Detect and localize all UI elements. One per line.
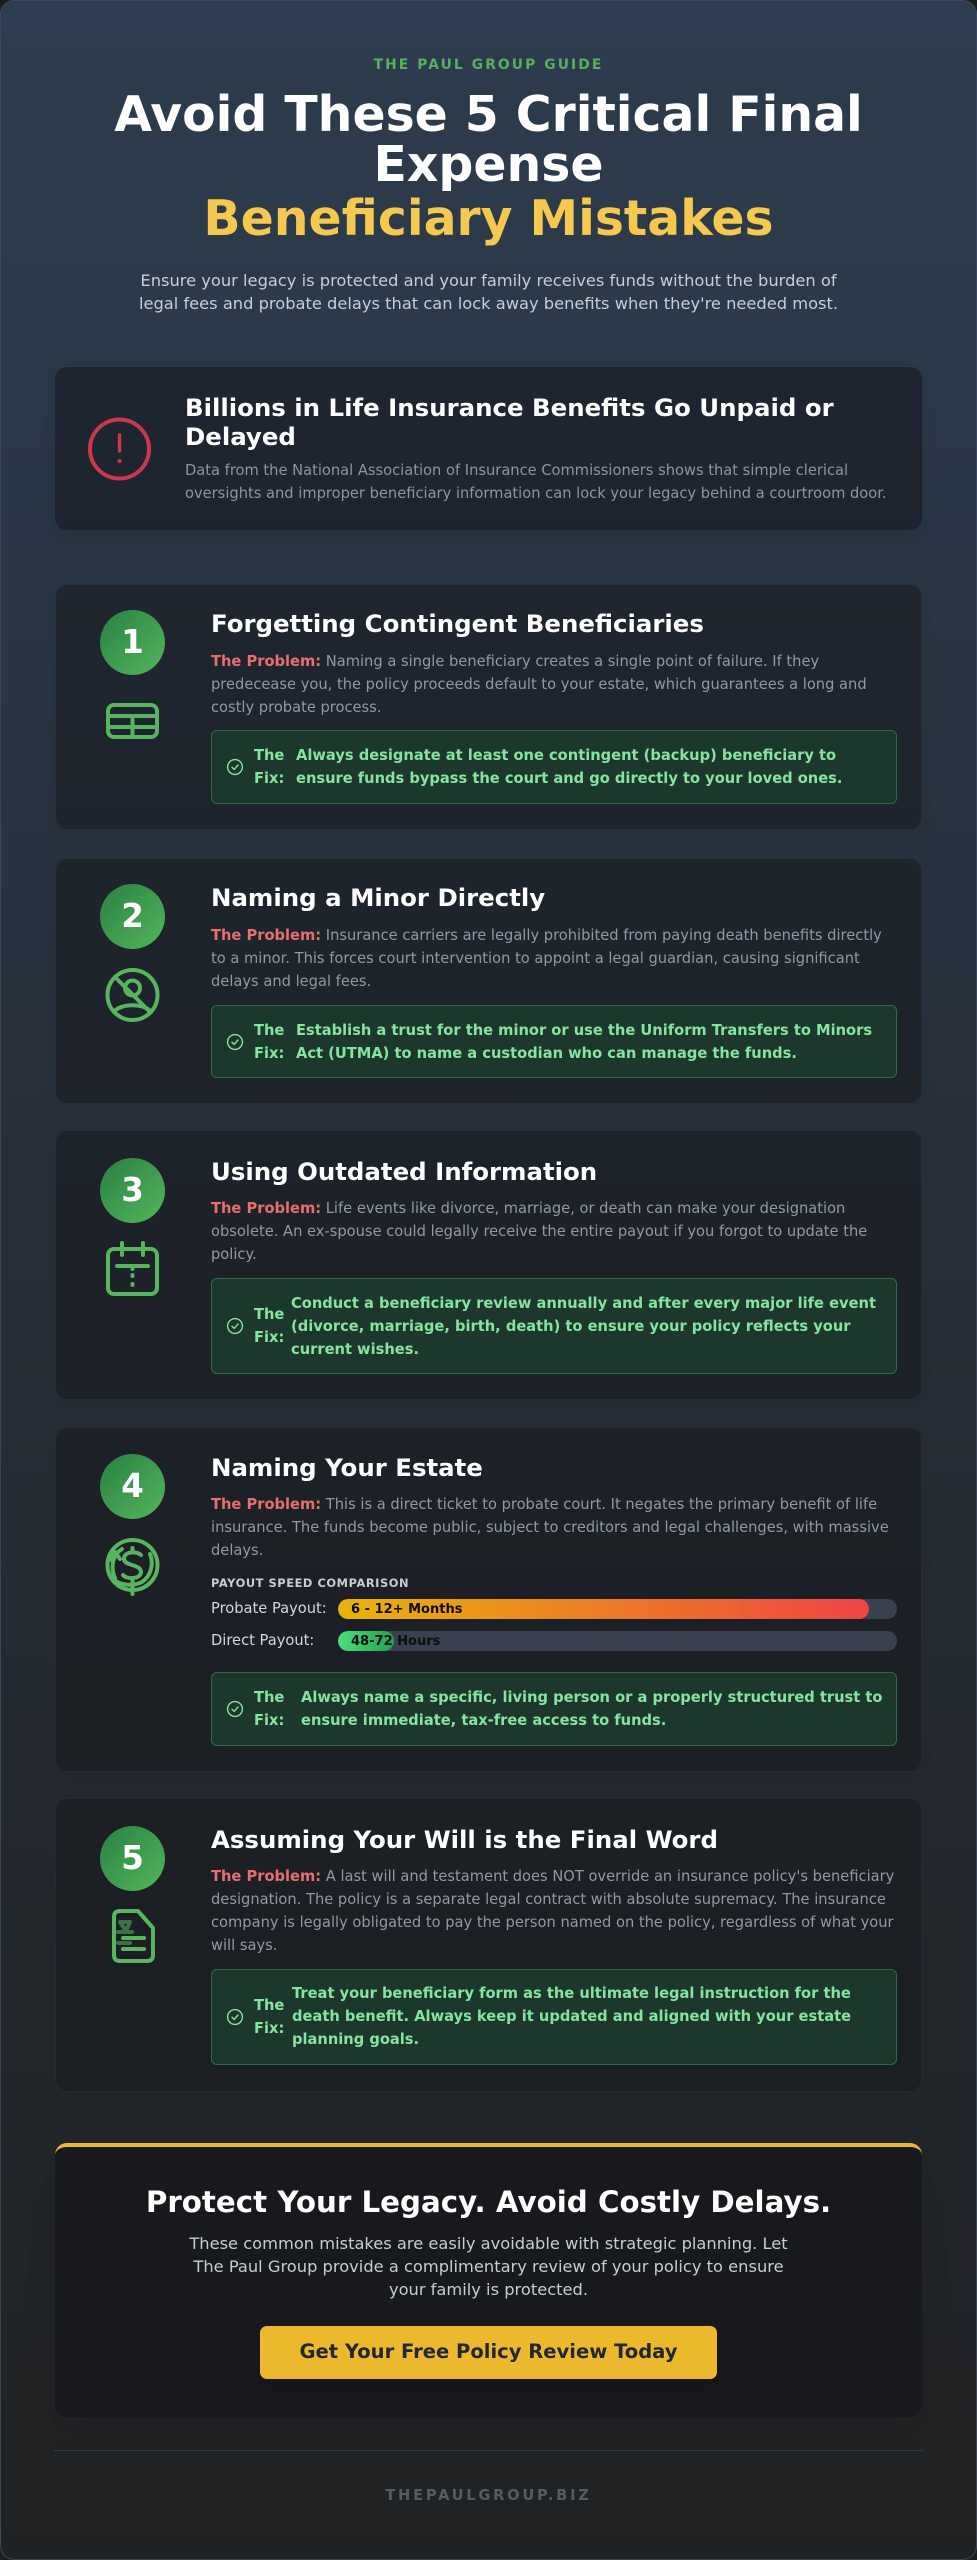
subtitle: Ensure your legacy is protected and your family receives funds without the burden of: [140, 271, 837, 290]
fix text: [292, 1985, 851, 2048]
fix text: Establish a trust for the minor or use the Uniform Transfers to Minors: [296, 1022, 872, 1039]
fix text: [296, 747, 842, 787]
icon: check: [226, 758, 244, 776]
mistake 1 problem: [211, 653, 867, 716]
panel: mistake 4: [55, 1427, 922, 1772]
alert heading: Delayed: [185, 422, 296, 451]
fix label: Fix:: [254, 1329, 284, 1346]
mistake 4 problem: insurance. The funds become public, subject to creditors and legal challenges, with massive: [211, 1519, 889, 1536]
fix text: Always name a specific, living person or a properly structured trust to: [301, 1689, 882, 1706]
mistake 4 problem: [211, 1496, 889, 1559]
fix label: The: [254, 747, 284, 764]
mistake 4 heading: Naming Your Estate: [211, 1453, 483, 1482]
bar: probate: 6 - 12+ Months: [351, 1602, 462, 1617]
icon: table: [106, 703, 159, 739]
number badge 1: 1: [121, 623, 144, 661]
mistake 5 problem: will says.: [211, 1937, 277, 1954]
mistake 1 heading: Forgetting Contingent Beneficiaries: [211, 609, 704, 638]
mistake 5 problem: The Problem: A last will and testament does NOT override an insurance policy's beneficiary: [211, 1868, 894, 1885]
alert description: [185, 462, 887, 502]
fix text: death benefit. Always keep it updated and aligned with your estate: [292, 2008, 851, 2025]
number badge 4: 4: [121, 1467, 144, 1505]
mistake 1 problem: The Problem: Naming a single beneficiary creates a single point of failure. If they: [211, 653, 819, 670]
mistake 3 problem: The Problem: Life events like divorce, marriage, or death can make your designation: [211, 1200, 845, 1217]
title: [114, 86, 863, 247]
fix text: Always designate at least one contingent (backup) beneficiary to: [296, 747, 836, 764]
fix text: (divorce, marriage, birth, death) to ensure your policy reflects your: [291, 1318, 851, 1335]
fix text: [296, 1022, 872, 1062]
number badge 5: 5: [121, 1839, 144, 1877]
fix callout 5: [211, 1969, 897, 2065]
title: Beneficiary Mistakes: [203, 190, 774, 247]
fix callout 4: [211, 1672, 897, 1746]
icon: no person: [106, 968, 160, 1022]
icon: check: [226, 1034, 244, 1050]
fix label: The: [254, 1689, 284, 1706]
CTA text: [189, 2234, 788, 2299]
panel: mistake 2: [55, 858, 922, 1104]
fix text: [301, 1689, 882, 1729]
bar: direct: [338, 1631, 897, 1651]
mistake 5 problem: company is legally obligated to pay the person named on the policy, regardless of what your: [211, 1914, 894, 1931]
icon: check: [226, 2008, 244, 2026]
icon: calendar: [106, 1241, 159, 1296]
icon: alert circle: [88, 418, 151, 480]
fix callout 1: [211, 730, 897, 804]
fix label: The: [254, 1022, 284, 1039]
icon: document: [112, 1909, 155, 1963]
fix label: [254, 1997, 284, 2037]
mistake 5 problem: [211, 1868, 894, 1954]
CTA text: your family is protected.: [389, 2280, 588, 2299]
fix text: [291, 1295, 876, 1358]
panel: call to action: [55, 2143, 922, 2417]
fix label: The: [254, 1306, 284, 1323]
panel: mistake 1: [55, 584, 922, 830]
panel: alert banner: [55, 367, 922, 530]
fix label: Fix:: [254, 770, 284, 787]
fix label: [254, 1306, 284, 1346]
mistake 5 problem: designation. The policy is a separate legal contract with absolute supremacy. The insurance: [211, 1891, 886, 1908]
mistake 2 heading: Naming a Minor Directly: [211, 883, 545, 912]
mistake 3 problem: [211, 1200, 867, 1263]
number badge 2: [100, 884, 165, 949]
CTA button: [260, 2326, 717, 2379]
alert heading: [185, 393, 834, 451]
icon: check: [226, 1318, 244, 1334]
fix label: Fix:: [254, 1712, 284, 1729]
mistake 4 problem: The Problem: This is a direct ticket to probate court. It negates the primary benefit of life: [211, 1496, 877, 1513]
title: Avoid These 5 Critical Final: [114, 86, 863, 143]
fix text: current wishes.: [291, 1341, 419, 1358]
chart: payout speed comparison: [211, 1576, 897, 1651]
number badge 1: [100, 610, 165, 675]
fix label: [254, 747, 284, 787]
number badge 4: [100, 1454, 165, 1519]
subtitle: [139, 271, 838, 313]
fix label: Fix:: [254, 2020, 284, 2037]
alert description: oversights and improper beneficiary information can lock your legacy behind a courtroom door.: [185, 485, 887, 502]
alert heading: Billions in Life Insurance Benefits Go Unpaid or: [185, 393, 834, 422]
subtitle: legal fees and probate delays that can lock away benefits when they're needed most.: [139, 294, 838, 313]
mistake 3 problem: obsolete. An ex-spouse could legally receive the entire payout if you forgot to update the: [211, 1223, 867, 1240]
mistake 2 problem: [211, 927, 882, 990]
mistake 1 problem: costly probate process.: [211, 699, 381, 716]
row label: probate: Probate Payout:: [211, 1600, 327, 1617]
CTA heading: Protect Your Legacy. Avoid Costly Delays.: [146, 2185, 831, 2219]
title: Expense: [374, 136, 603, 193]
panel: mistake 5: [55, 1798, 922, 2092]
bar: probate: [338, 1599, 897, 1619]
panel: mistake 3: [55, 1130, 922, 1400]
mistake 5 heading: Assuming Your Will is the Final Word: [211, 1825, 718, 1854]
row label: direct: Direct Payout:: [211, 1632, 314, 1649]
number badge 2: 2: [121, 897, 144, 935]
number badge 5: [100, 1826, 165, 1891]
fix text: ensure funds bypass the court and go directly to your loved ones.: [296, 770, 842, 787]
fix callout 3: [211, 1278, 897, 1374]
mistake 2 problem: to a minor. This forces court intervention to appoint a legal guardian, causing significant: [211, 950, 860, 967]
fix label: [254, 1022, 284, 1062]
fix text: ensure immediate, tax-free access to funds.: [301, 1712, 666, 1729]
fix callout 2: [211, 1005, 897, 1078]
number badge 3: 3: [121, 1171, 144, 1209]
fix text: Conduct a beneficiary review annually and after every major life event: [291, 1295, 876, 1312]
chart heading: PAYOUT SPEED COMPARISON: [211, 1576, 409, 1590]
fix text: planning goals.: [292, 2031, 419, 2048]
fix text: Act (UTMA) to name a custodian who can manage the funds.: [296, 1045, 797, 1062]
fix label: Fix:: [254, 1045, 284, 1062]
fix label: [254, 1689, 284, 1729]
mistake 2 problem: The Problem: Insurance carriers are legally prohibited from paying death benefits directly: [211, 927, 882, 944]
fix text: Treat your beneficiary form as the ultimate legal instruction for the: [292, 1985, 851, 2002]
fix label: The: [254, 1997, 284, 2014]
eyebrow label: THE PAUL GROUP GUIDE: [374, 57, 603, 73]
bar: direct: 48-72 Hours: [351, 1634, 440, 1649]
mistake 1 problem: predecease you, the policy proceeds default to your estate, which guarantees a long and: [211, 676, 867, 693]
footer: THEPAULGROUP.BIZ: [385, 2487, 592, 2504]
mistake 2 problem: delays and legal fees.: [211, 973, 371, 990]
CTA text: The Paul Group provide a complimentary review of your policy to ensure: [193, 2257, 784, 2276]
icon: check: [226, 1700, 244, 1718]
alert description: Data from the National Association of Insurance Commissioners shows that simple clerical: [185, 462, 848, 479]
CTA button: Get Your Free Policy Review Today: [299, 2340, 678, 2363]
CTA text: These common mistakes are easily avoidable with strategic planning. Let: [189, 2234, 788, 2253]
mistake 4 problem: delays.: [211, 1542, 263, 1559]
number badge 3: [100, 1158, 165, 1223]
mistake 3 problem: policy.: [211, 1246, 257, 1263]
mistake 3 heading: Using Outdated Information: [211, 1157, 597, 1186]
icon: dollar cycle: [106, 1538, 160, 1596]
